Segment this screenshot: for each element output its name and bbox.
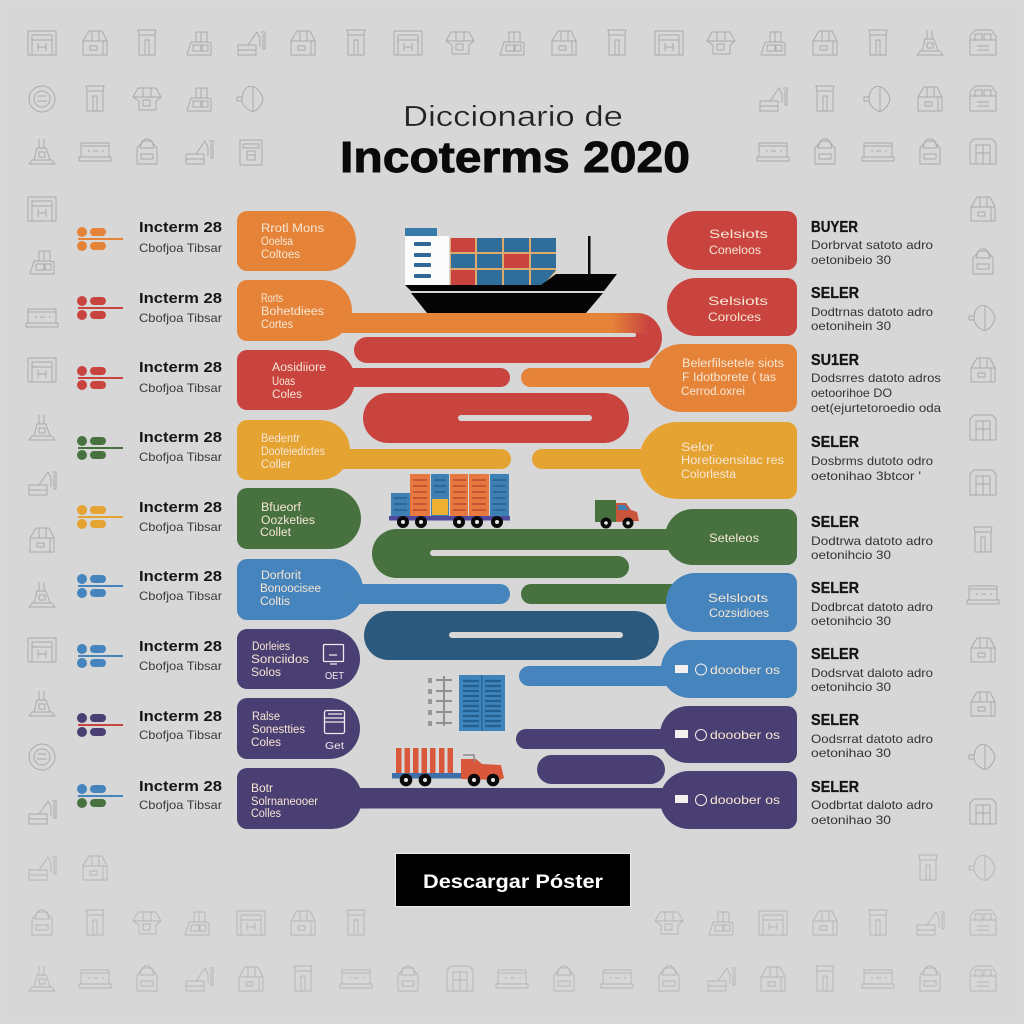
panel: left 3 red with connector: Uoas — [272, 376, 295, 388]
text block: seller 4: SELER — [811, 434, 859, 451]
panel: right 9 purple: dooober os — [710, 793, 780, 807]
text block: buyer: Dorbrvat satoto adro — [811, 238, 933, 252]
button: download poster: Descargar Póster — [423, 872, 604, 893]
text block: seller 8: SELER — [811, 712, 859, 729]
text block: seller 6: Dodbrcat datoto adro — [811, 600, 933, 614]
left row 2 — [77, 290, 222, 325]
left row 3: Incterm 28 — [139, 359, 222, 376]
panel: left 1 orange: Ooelsa — [261, 236, 294, 248]
text block: seller 5: Dodtrwa datoto adro — [811, 534, 933, 548]
icon: green pills — [77, 436, 123, 460]
left row 4: Incterm 28 — [139, 429, 222, 446]
text block: seller 2 — [811, 285, 933, 333]
flow band: red loop — [363, 393, 629, 443]
icon: container truck — [389, 474, 510, 528]
text block: seller 2: oetonihein 30 — [811, 319, 891, 333]
panel: left 1 orange — [237, 211, 356, 271]
text block: seller 5 — [811, 514, 933, 562]
panel: right 5 green: Seteleos — [709, 531, 759, 545]
left row 2: Cbofjoa Tibsar — [139, 311, 222, 325]
text block: seller 4: Dosbrms dutoto odro — [811, 454, 933, 468]
left row 4: Cbofjoa Tibsar — [139, 450, 222, 464]
title: Diccionario de — [403, 101, 623, 133]
left row 2: Incterm 28 — [139, 290, 222, 307]
text block: seller 3 — [811, 352, 941, 415]
panel: left 7 purple: Sonciidos — [251, 654, 309, 666]
left row 1 — [77, 219, 222, 255]
left row 7: Cbofjoa Tibsar — [139, 659, 222, 673]
panel: left 9 purple: Colles — [251, 808, 281, 820]
text block: seller 9 — [811, 779, 933, 827]
panel: left 8 purple: Sonestties — [252, 724, 305, 736]
icon: warehouse racks and blue container — [428, 675, 505, 731]
title: Incoterms 2020 — [340, 133, 690, 182]
panel: left 6 blue with connector: Bonoocisee — [260, 583, 321, 595]
text block: seller 9: SELER — [811, 779, 859, 796]
left row 4 — [77, 429, 222, 464]
icon: ticket — [675, 795, 688, 803]
left row 1: Incterm 28 — [139, 219, 222, 236]
text block: seller 4: oetonihao 3btcor ' — [811, 469, 921, 483]
left row 1: Cbofjoa Tibsar — [139, 241, 222, 255]
panel: right 2 red: Selsiots — [708, 294, 768, 308]
panel: left 5 green: Oozketies — [261, 515, 315, 527]
icon: blue pills — [77, 644, 123, 668]
icon: clock — [696, 730, 706, 740]
panel: right 5 green — [665, 509, 797, 565]
panel: left 4 yellow with connector: Bedentr — [261, 433, 300, 445]
text block: seller 4 — [811, 434, 933, 483]
text block: seller 5: SELER — [811, 514, 859, 531]
panel: right 3 orange with connector: F Idotborete ( tas — [682, 372, 776, 384]
icon: monitor — [324, 644, 344, 664]
left row 5: Incterm 28 — [139, 499, 222, 516]
text block: seller 3: Dodsrres datoto adros — [811, 371, 941, 385]
panel: left 2 orange — [237, 280, 352, 341]
icon: small green truck — [595, 500, 639, 528]
panel: left 5 green: Bfueorf — [261, 502, 302, 514]
panel: left 8 purple — [237, 698, 360, 759]
flow band: green U-turn — [372, 529, 670, 578]
icon: purple pills with red line — [77, 713, 123, 737]
text block: seller 3: oet(ejurtetoroedio oda — [811, 401, 941, 415]
text block: seller 9: oetonihao 30 — [811, 813, 891, 827]
flow band: orange to red U-turn — [342, 313, 662, 363]
flow bar: purple long connector — [340, 788, 690, 808]
panel: right 7 blue with connector — [519, 640, 797, 698]
title — [340, 101, 690, 182]
panel: left 7 purple: Solos — [251, 667, 281, 679]
panel: right 4 yellow with connector: Colorlesta — [681, 469, 737, 481]
icon: red pills — [77, 296, 123, 320]
panel: right 4 yellow with connector — [532, 422, 797, 499]
text block: seller 6: SELER — [811, 580, 859, 597]
panel: left 2 orange: Bohetdiees — [261, 306, 324, 318]
left row 9: Cbofjoa Tibsar — [139, 798, 222, 812]
panel: right 1 red: Coneloos — [709, 243, 761, 257]
text block: buyer — [811, 219, 933, 267]
left row 9: Incterm 28 — [139, 778, 222, 795]
panel: right 6 blue with green connector: Selsloots — [708, 591, 768, 605]
left row 8: Cbofjoa Tibsar — [139, 728, 222, 742]
panel: left 9 purple: Botr — [251, 783, 273, 795]
text block: seller 3: SU1ER — [811, 352, 859, 369]
panel: left 8 purple: Ralse — [252, 711, 280, 723]
text block: seller 7: SELER — [811, 646, 859, 663]
panel: left 3 red with connector: Coles — [272, 389, 302, 401]
text block: seller 2: Dodtrnas datoto adro — [811, 305, 933, 319]
left row 3 — [77, 359, 222, 395]
icon: orange flatbed truck — [392, 748, 504, 786]
panel: right 3 orange with connector: Belerfilsetele siots — [682, 358, 784, 370]
panel: left 2 orange: Rorts — [261, 293, 283, 305]
panel: right 7 blue with connector: dooober os — [710, 663, 780, 677]
left row 8: Incterm 28 — [139, 708, 222, 725]
text block: seller 8: oetonihao 30 — [811, 746, 891, 760]
left row 5: Cbofjoa Tibsar — [139, 520, 222, 534]
panel: left 6 blue with connector — [237, 559, 510, 620]
icon: orange pills — [77, 227, 123, 251]
left row 7: Incterm 28 — [139, 638, 222, 655]
panel: left 1 orange: Rrotl Mons — [261, 223, 324, 235]
button: download poster — [396, 854, 630, 906]
panel: right 8 purple with connector: dooober os — [710, 728, 780, 742]
panel: right 6 blue with green connector — [521, 573, 797, 632]
icon: ticket — [675, 730, 688, 738]
panel: left 4 yellow with connector: Dooteiedictes — [261, 446, 325, 458]
icon: clock — [696, 664, 706, 675]
text block: seller 8: Oodsrrat datoto adro — [811, 732, 933, 746]
icon: ticket — [675, 665, 688, 673]
panel: left 3 red with connector: Aosidiiore — [272, 362, 326, 374]
text block: seller 5: oetonihcio 30 — [811, 548, 891, 562]
panel: right 4 yellow with connector: Horetioensitac res — [681, 455, 784, 467]
panel: left 6 blue with connector: Dorforit — [261, 570, 302, 582]
left row 6 — [77, 568, 222, 603]
icon: container ship — [405, 228, 617, 313]
panel: right 1 red — [667, 211, 797, 270]
panel: right 6 blue with green connector: Cozsidioes — [709, 606, 769, 620]
panel: left 7 purple: OET — [325, 671, 344, 682]
icon: yellow pills — [77, 505, 123, 529]
text block: buyer: oetonibeio 30 — [811, 253, 891, 267]
text block: seller 7: Dodsrvat daloto adro — [811, 666, 933, 680]
text block: seller 8 — [811, 712, 933, 760]
panel: left 7 purple: Dorleies — [252, 641, 290, 653]
text block: seller 6 — [811, 580, 933, 628]
text block: seller 9: Oodbrtat daloto adro — [811, 798, 933, 812]
panel: left 9 purple — [237, 768, 362, 829]
flow pill: purple — [537, 755, 665, 784]
panel: left 2 orange: Cortes — [261, 319, 293, 331]
text block: seller 2: SELER — [811, 285, 859, 302]
panel: right 3 orange with connector: Cerrod.oxrei — [681, 386, 745, 398]
text block: seller 3: oetoorihoe DO — [811, 386, 892, 400]
text block: seller 7 — [811, 646, 933, 694]
panel: right 1 red: Selsiots — [709, 227, 768, 241]
icon: red pills — [77, 366, 123, 390]
panel: left 8 purple: Coles — [251, 737, 281, 749]
text block: seller 6: oetonihcio 30 — [811, 614, 891, 628]
icon: clock — [696, 794, 706, 806]
panel: left 5 green: Collet — [260, 527, 292, 539]
text block: seller 7: oetonihcio 30 — [811, 680, 891, 694]
icon: blue and green pills — [77, 784, 123, 808]
left row 6: Cbofjoa Tibsar — [139, 589, 222, 603]
panel: left 3 red with connector — [237, 350, 510, 410]
left row 9 — [77, 778, 222, 812]
icon: blue pills — [77, 574, 123, 598]
panel: right 3 orange with connector — [521, 344, 797, 412]
panel: left 8 purple: Get — [325, 741, 344, 752]
panel: right 8 purple with connector — [516, 706, 797, 763]
panel: left 9 purple: Solrnaneooer — [251, 796, 318, 808]
panel: left 5 green — [237, 488, 361, 549]
left row 6: Incterm 28 — [139, 568, 222, 585]
panel: left 6 blue with connector: Coltis — [260, 596, 290, 608]
left row 5 — [77, 499, 222, 534]
panel: left 7 purple — [237, 629, 360, 689]
panel: left 4 yellow with connector — [237, 420, 511, 480]
text block: buyer: BUYER — [811, 219, 858, 236]
left row 3: Cbofjoa Tibsar — [139, 381, 222, 395]
panel: right 2 red: Corolces — [708, 310, 761, 324]
icon: calendar panel — [324, 710, 344, 734]
left row 7 — [77, 638, 222, 673]
left row 8 — [77, 708, 222, 742]
panel: right 2 red — [667, 278, 797, 336]
flow band: dark blue loop — [364, 611, 659, 660]
panel: left 1 orange: Coltoes — [261, 249, 300, 261]
panel: right 4 yellow with connector: Selor — [681, 442, 714, 454]
panel: right 9 purple — [660, 771, 797, 829]
panel: left 4 yellow with connector: Coller — [261, 459, 291, 471]
